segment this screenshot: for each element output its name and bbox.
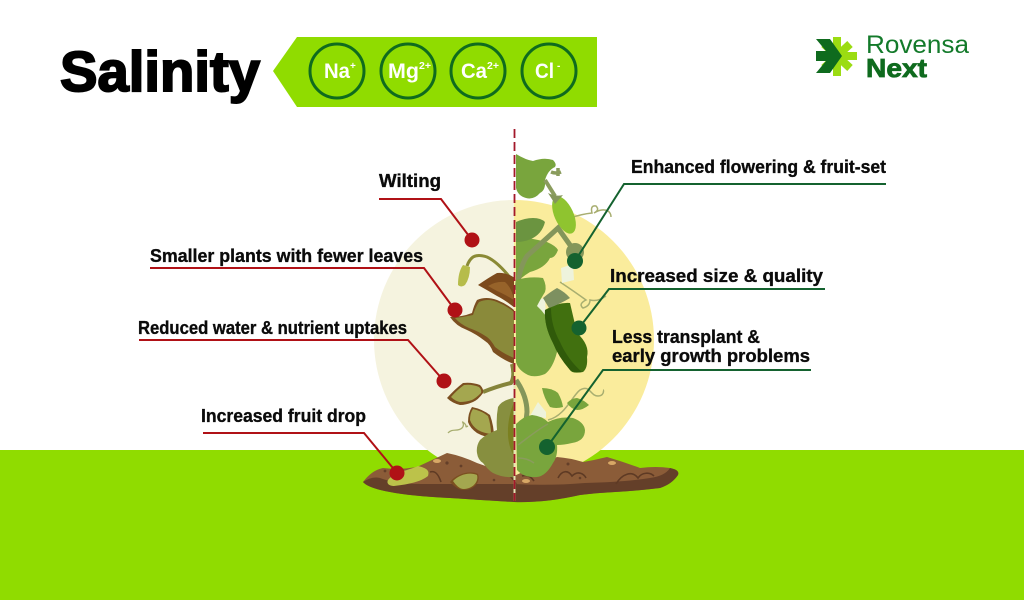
title: Salinity bbox=[60, 40, 260, 104]
small cucumber bbox=[548, 193, 576, 234]
bud bbox=[458, 265, 470, 286]
icon: logo star bbox=[816, 37, 857, 76]
olive big leaf bbox=[450, 298, 514, 364]
callout: smaller plants: Smaller plants with fewer leaves bbox=[150, 245, 423, 266]
small leaf two bbox=[468, 407, 494, 438]
sun circle: treated side bbox=[514, 200, 654, 476]
callout: wilting bbox=[379, 170, 480, 248]
ion: magnesium bbox=[381, 44, 435, 98]
fallen fruit bbox=[387, 466, 429, 486]
callout: reduced uptake bbox=[138, 317, 452, 388]
ion: magnesium: 2+ bbox=[419, 61, 431, 72]
center divider bbox=[514, 129, 516, 501]
callout: flowering: Enhanced flowering & fruit-set bbox=[631, 156, 886, 177]
callout: smaller plants bbox=[150, 245, 462, 318]
callout: fruit drop bbox=[201, 405, 404, 480]
ion: calcium bbox=[451, 44, 505, 98]
callout: size and quality: Increased size & quality bbox=[610, 265, 824, 286]
callout: flowering bbox=[567, 156, 886, 269]
dark leaf bbox=[516, 218, 545, 242]
tendrils bbox=[548, 206, 611, 420]
ion: chloride: - bbox=[557, 61, 560, 72]
logo bbox=[816, 31, 969, 83]
lower stem bbox=[516, 378, 530, 418]
upper leaf bbox=[516, 238, 558, 278]
callout: fruit drop: Increased fruit drop bbox=[201, 405, 366, 426]
callout: size and quality bbox=[572, 265, 825, 336]
callout: transplant: early growth problems bbox=[612, 345, 810, 366]
main stem bbox=[517, 228, 575, 290]
ion: sodium bbox=[310, 44, 364, 98]
lower leaf bbox=[477, 398, 514, 477]
small leaf one bbox=[447, 383, 483, 405]
main stem bbox=[483, 364, 513, 392]
sun circle: salinity side bbox=[374, 200, 514, 466]
tendril bbox=[448, 422, 468, 433]
ion: chloride bbox=[522, 44, 576, 98]
soil mound bbox=[363, 453, 678, 502]
callout: transplant bbox=[539, 326, 811, 455]
ion: calcium: Ca bbox=[461, 60, 487, 83]
large cucumber bbox=[543, 288, 588, 373]
soil leaf bbox=[450, 472, 479, 490]
callout: wilting: Wilting bbox=[379, 170, 441, 191]
callout: reduced uptake: Reduced water & nutrient uptakes bbox=[138, 317, 407, 338]
lower leaf bbox=[516, 415, 585, 477]
middle leaf mass bbox=[516, 277, 557, 376]
ion banner bbox=[273, 37, 597, 107]
small leaves bbox=[542, 388, 563, 408]
white flowers bbox=[561, 264, 574, 283]
ion: calcium: 2+ bbox=[487, 61, 499, 72]
plant: healthy side bbox=[516, 154, 611, 477]
brown leaf bbox=[478, 273, 515, 308]
ion: chloride: Cl bbox=[535, 60, 554, 83]
plant: salinity side bbox=[387, 256, 515, 490]
top leaf bbox=[516, 154, 556, 198]
ion: sodium: + bbox=[350, 61, 356, 72]
callout: transplant: Less transplant & bbox=[612, 326, 760, 347]
logo wordmark: Rovensa bbox=[866, 31, 969, 59]
ground band bbox=[0, 450, 1024, 600]
wilted stem bbox=[466, 254, 510, 276]
logo: Next bbox=[866, 53, 927, 83]
ion: sodium: Na bbox=[324, 60, 350, 83]
stem bbox=[545, 180, 555, 196]
ion: magnesium: Mg bbox=[388, 60, 419, 83]
bud ball bbox=[566, 243, 584, 258]
